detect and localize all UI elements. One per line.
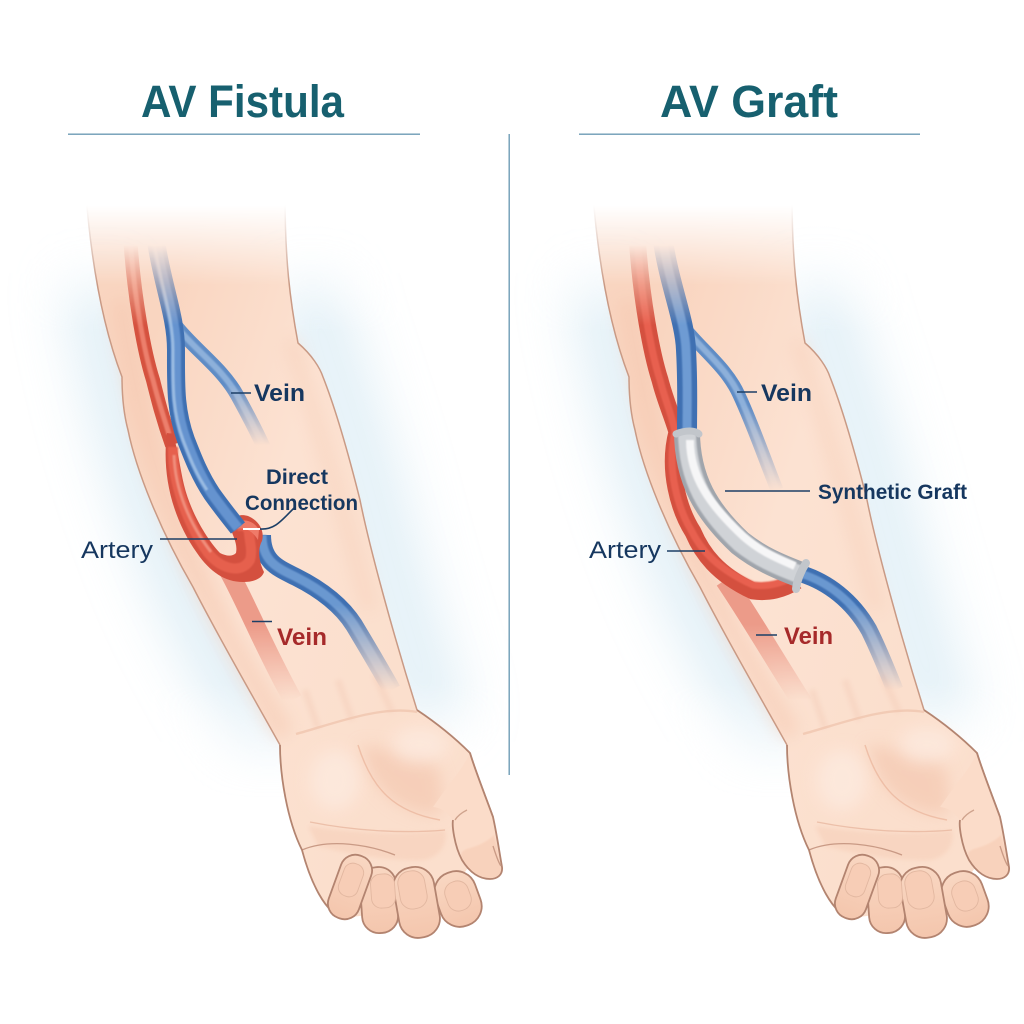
- label: vein: Vein: [761, 380, 812, 407]
- label: direct connection: [243, 466, 358, 529]
- label: synthetic graft: Synthetic Graft: [818, 481, 967, 504]
- blue vein upper: [662, 235, 687, 434]
- label: red vein: Vein: [784, 623, 833, 650]
- artery loop to direct connection: [166, 433, 264, 582]
- panel: AV Graft arm illustration: [589, 195, 1009, 941]
- left heading rule: [68, 134, 420, 135]
- pale vein below artery: [725, 580, 807, 710]
- graft cuff bottom: [796, 563, 806, 589]
- title: AV Graft: AV Graft: [660, 76, 838, 127]
- label: vein: [231, 380, 305, 407]
- synthetic graft: [676, 431, 806, 589]
- label: artery: [589, 537, 705, 564]
- title: AV Fistula: AV Fistula: [141, 76, 345, 127]
- right heading rule: [579, 134, 920, 135]
- label: vein: Vein: [254, 380, 305, 407]
- label: red vein: [756, 623, 833, 650]
- blue vein upper with branch: [153, 235, 264, 528]
- arm and hand: [593, 195, 1009, 941]
- centre divider: [508, 134, 510, 775]
- blue vein lower: [262, 535, 392, 690]
- artery: [637, 235, 797, 592]
- artery upper segment: [130, 235, 172, 445]
- arm and hand: [86, 195, 502, 941]
- panel: AV Fistula arm illustration: [81, 195, 502, 941]
- blue vein lower: [802, 574, 895, 690]
- label: vein: [737, 380, 812, 407]
- label: artery: Artery: [81, 537, 153, 564]
- label: red vein: Vein: [277, 624, 327, 651]
- pale vein below connection: [228, 570, 293, 700]
- label: artery: Artery: [589, 537, 661, 564]
- label: direct connection: Connection: [245, 492, 358, 515]
- label: direct connection: Direct: [266, 466, 328, 489]
- label: red vein: [252, 622, 327, 651]
- blue vein branch: [683, 326, 777, 490]
- graft cuff top: [676, 431, 699, 434]
